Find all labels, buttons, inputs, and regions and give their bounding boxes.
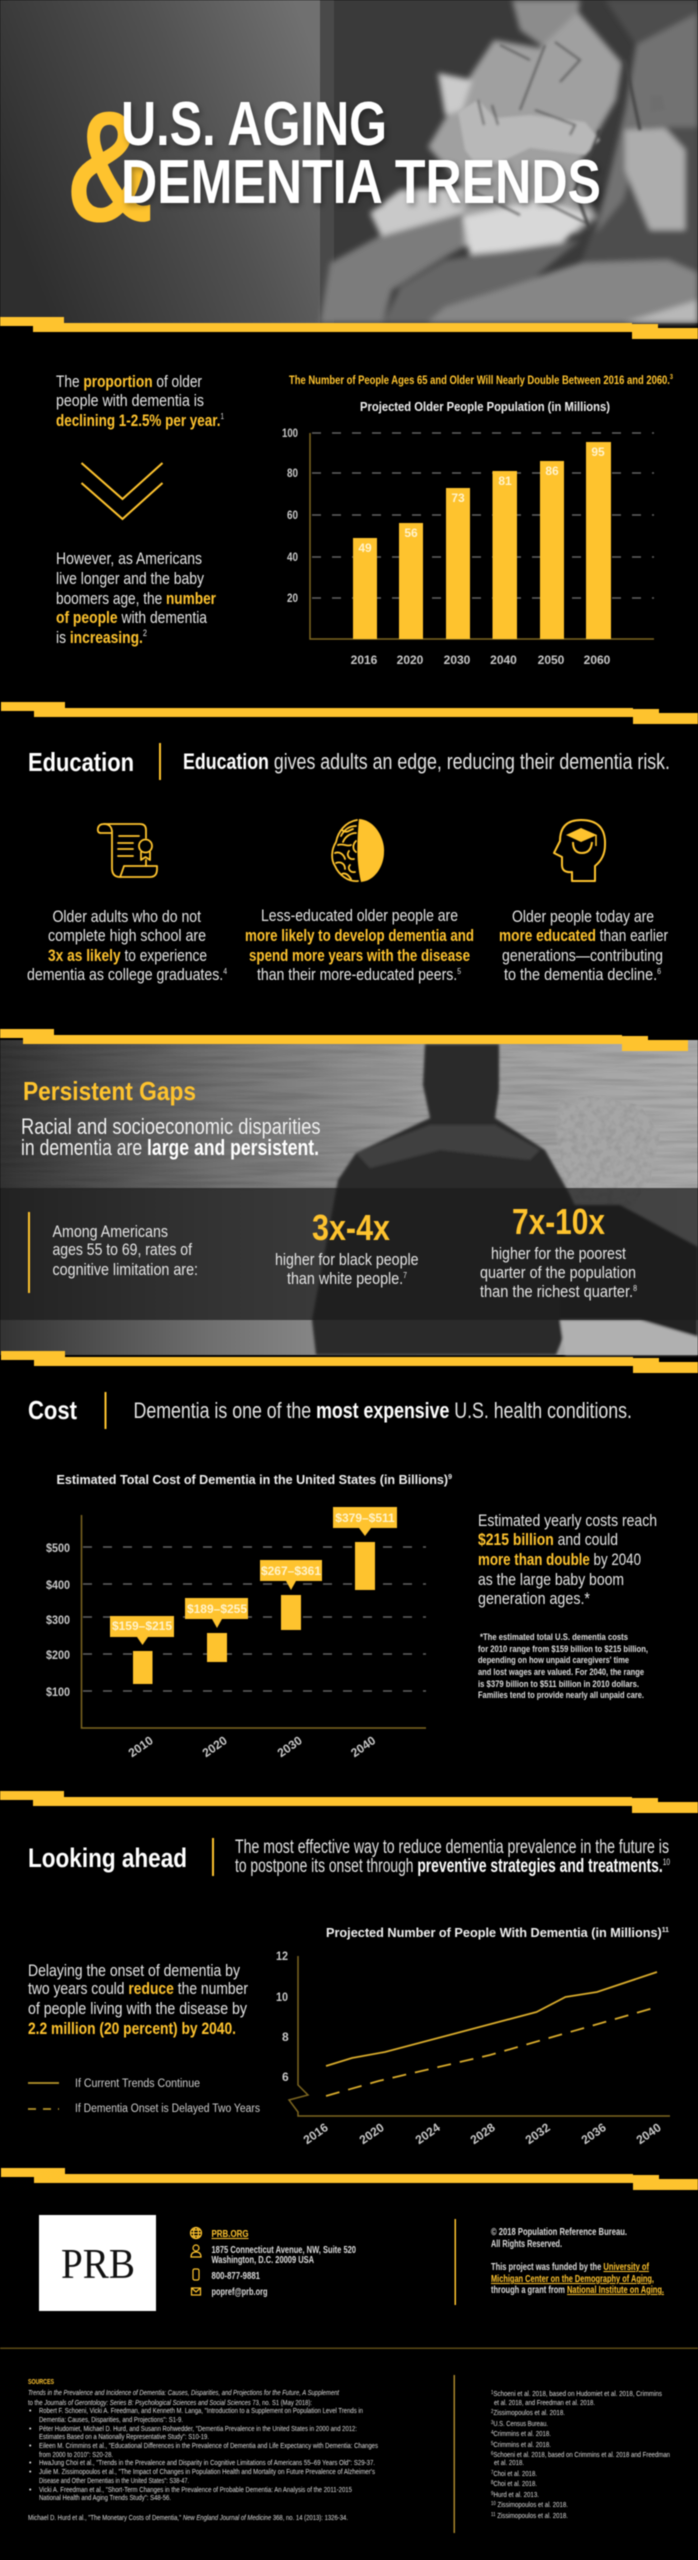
text: among Americans: ages 55 to 69, rates of: [52, 1241, 192, 1259]
text: among Americans: Among Americans: [52, 1223, 168, 1241]
endnotes: 2: [491, 2409, 494, 2415]
credits: All Rights Reserved.: [491, 2239, 562, 2250]
gaps summary: in dementia are large and persistent.: [21, 1135, 319, 1160]
bar chart: older population: 86: [545, 464, 559, 478]
bar chart: older population: 80: [287, 466, 298, 480]
range chart: cost of dementia: $189–$255: [187, 1602, 247, 1616]
text: more educated: 6: [657, 967, 661, 976]
endnotes: 8: [491, 2480, 494, 2486]
endnotes: Zissimopoulos et al. 2018.: [496, 2513, 568, 2520]
text: delaying onset: two years could reduce the number: [28, 1979, 248, 1998]
logo: PRB: [39, 2215, 156, 2311]
endnotes: 6: [491, 2451, 494, 2457]
dark overlay band: [0, 1188, 698, 1320]
icon: double down chevron: [82, 463, 162, 519]
gaps summary: [21, 1114, 320, 1160]
heading: persistent gaps: Persistent Gaps: [23, 1076, 196, 1106]
icon: half-filled brain: [332, 819, 384, 882]
endnotes: Crimmins et al. 2018.: [493, 2442, 551, 2449]
text: estimated yearly costs: [478, 1511, 657, 1608]
line chart: projected dementia: 8: [282, 2030, 289, 2044]
endnotes: 10: [491, 2501, 496, 2507]
bar chart: older population: 2050: [538, 653, 565, 667]
source list: •: [29, 2487, 32, 2494]
text: estimated yearly costs: generation ages.*: [478, 1589, 590, 1608]
stat: 7x-10x: than the richest quarter.: [480, 1283, 653, 1301]
text: number of people increasing: boomers age, the number: [56, 589, 216, 608]
bar chart: older population: 40: [287, 550, 298, 564]
title: U.S. AGING: [121, 90, 387, 159]
panel: footer: [39, 2215, 664, 2311]
legend: If Dementia Onset is Delayed Two Years: [75, 2103, 260, 2115]
logo: PRB: PRB: [61, 2242, 135, 2288]
text: estimated yearly costs: Estimated yearly costs reach: [478, 1511, 657, 1530]
contact details: 1875 Connecticut Avenue, NW, Suite 520: [212, 2245, 356, 2256]
looking ahead subtitle: 10: [663, 1857, 670, 1867]
header backdrop gradient: [0, 0, 320, 323]
source list: Eileen M. Crimmins et al., "Educational Differences in the Prevalence of Dementia and Life Expectancy with Dementia: Changes: [39, 2443, 378, 2450]
panel: sources: [28, 2375, 670, 2533]
line chart: projected dementia: 2036: [579, 2120, 609, 2147]
source list: •: [29, 2426, 32, 2433]
header panel: [0, 0, 698, 323]
text: among Americans: [52, 1223, 198, 1279]
text: more educated: to the dementia decline.: [504, 966, 679, 984]
range chart: cost of dementia: $100: [46, 1685, 70, 1699]
credits: © 2018 Population Reference Bureau.: [491, 2227, 627, 2238]
range chart: cost of dementia: 2030: [275, 1733, 305, 1760]
footnote: cost estimate: Families tend to provide nearly all unpaid care.: [478, 1690, 644, 1700]
header ribbon: [0, 317, 698, 339]
bar chart: older population: 2040: [490, 653, 517, 667]
range chart: cost of dementia: 2040: [348, 1733, 378, 1760]
text: proportion declining: 1: [220, 412, 224, 421]
source list: to the Journals of Gerontology: Series B: Psychological Sciences and Social Sciences 73, no. S1 (May 2018):: [28, 2400, 312, 2407]
contact details: Washington, D.C. 20009 USA: [212, 2255, 314, 2266]
text: among Americans: cognitive limitation are:: [52, 1261, 198, 1279]
text: high school: complete high school are: [48, 927, 206, 945]
endnotes: et al. 2018, and Freedman et al. 2018.: [494, 2400, 595, 2407]
source list: Estimates Based on a Nationally Representative Study": S10-19.: [39, 2434, 209, 2441]
source list: Robert F. Schoeni, Vicki A. Freedman, and Kenneth M. Langa, "Introduction to a Supplement on Population Level Trends in: [39, 2408, 363, 2415]
icon: phone: [193, 2269, 199, 2280]
cost subtitle: Dementia is one of the most expensive U.S. health conditions.: [134, 1398, 632, 1423]
footnote: cost estimate: depending on how unpaid caregivers' time: [478, 1655, 629, 1665]
bar chart: older population: 2030: [444, 653, 471, 667]
bar chart: older population: 73: [451, 491, 465, 505]
text: more educated: Older people today are: [512, 908, 654, 926]
line chart: projected dementia: 2024: [413, 2120, 443, 2147]
divider: [212, 1838, 214, 1876]
contact details: PRB.ORG: [212, 2229, 249, 2240]
header photo: man and nurse sitting on a bed: [320, 0, 698, 323]
endnotes: [491, 2390, 670, 2520]
text: delaying onset: Delaying the onset of dementia by: [28, 1961, 240, 1980]
icon: diploma scroll: [98, 824, 157, 877]
endnotes: Hurd et al. 2013.: [493, 2492, 539, 2499]
text: proportion declining: The proportion of older: [56, 372, 202, 391]
bar chart: older population: 20: [287, 591, 298, 605]
divider: [28, 1212, 30, 1293]
ribbon divider: [1, 1351, 698, 1373]
text: number of people increasing: is increasing.: [56, 628, 160, 647]
rule: [0, 2348, 698, 2349]
ribbon divider: [0, 1791, 698, 1813]
line chart: projected dementia: 2028: [468, 2120, 498, 2147]
source list: National Health and Aging Trends Study": S48-56.: [39, 2495, 171, 2502]
panel: looking ahead: [28, 1837, 670, 2147]
source list: Julie M. Zissimopoulos et al., "The Impact of Changes in Population Health and Mortality on Future Prevalence of Alzheimer's: [39, 2469, 375, 2476]
text: more educated: [499, 908, 668, 984]
endnotes: Schoeni et al. 2018, based on Crimmins et al. 2018 and Freedman: [493, 2452, 670, 2459]
endnotes: 5: [491, 2441, 494, 2447]
text: more educated: generations—contributing: [502, 947, 663, 965]
stat: 7x-10x: 8: [633, 1284, 637, 1293]
bar chart: older population: [282, 426, 654, 667]
text: proportion declining: people with dementia is: [56, 391, 204, 410]
range chart: cost of dementia: 2020: [200, 1733, 230, 1760]
text: number of people increasing: live longer and the baby: [56, 569, 204, 588]
text: more educated: more educated than earlier: [499, 927, 668, 945]
source list: Dementia: Causes, Disparities, and Projections": S1-9.: [39, 2417, 183, 2424]
bar chart: older population: 60: [287, 508, 298, 522]
range chart: cost of dementia: $267–$361: [261, 1564, 321, 1578]
source list: [28, 2390, 378, 2522]
text: estimated yearly costs: as the large baby boom: [478, 1570, 624, 1589]
gaps summary: Racial and socioeconomic disparities: [21, 1114, 320, 1139]
source list: Trends in the Prevalence and Incidence of Dementia: Causes, Disparities, and Projections for the Future, A Supplement: [28, 2390, 340, 2397]
text: number of people increasing: However, as Americans: [56, 549, 202, 568]
divider: [454, 2219, 456, 2305]
divider: [104, 1392, 106, 1429]
panel: proportion and number of people: [56, 372, 673, 667]
source list: •: [29, 2408, 32, 2415]
divider: [159, 743, 161, 780]
text: less-educated: [245, 907, 474, 984]
title ampersand: &: [66, 79, 154, 255]
text: high school: Older adults who do not: [52, 908, 201, 926]
source list: Péter Hudomiet, Michael D. Hurd, and Susann Rohwedder, "Dementia Prevalence in the United States in 2000 and 2012:: [39, 2426, 357, 2433]
stat: 3x-4x: higher for black people: [275, 1251, 418, 1269]
text: high school: 3x as likely to experience: [48, 947, 207, 965]
credits: This project was funded by the University of: [491, 2262, 649, 2273]
bar chart: older population: 2020: [397, 653, 424, 667]
icon: head with graduation cap: [554, 820, 605, 881]
range chart: cost of dementia: $500: [46, 1541, 70, 1555]
bar chart: older population: 2016: [351, 653, 378, 667]
chart heading: 11: [662, 1927, 669, 1934]
footnote: cost estimate: is $379 billion to $511 billion in 2010 dollars.: [478, 1679, 639, 1689]
line chart: projected dementia: 2020: [357, 2120, 387, 2147]
bar chart: older population: 95: [591, 445, 605, 459]
legend: [28, 2078, 260, 2115]
endnotes: Schoeni et al. 2018, based on Hudomiet et al. 2018, Crimmins: [493, 2391, 662, 2398]
source list: from 2000 to 2010": S20-28.: [39, 2452, 113, 2459]
text: less-educated: 5: [457, 967, 461, 976]
bar chart: older population: 100: [282, 426, 298, 440]
icon: location person: [191, 2245, 201, 2257]
stat: 7x-10x: 7x-10x: [512, 1201, 605, 1242]
ribbon divider: [1, 702, 698, 724]
legend: If Current Trends Continue: [75, 2078, 200, 2090]
contact details: [212, 2229, 356, 2298]
endnotes: 4: [491, 2430, 494, 2436]
credits: [491, 2227, 664, 2296]
bar chart: older population: 2060: [584, 653, 611, 667]
source list: Vicki A. Freedman et al., "Short-Term Changes in the Prevalence of Probable Dementia: An Analysis of the 2011-2015: [39, 2487, 352, 2494]
title: [121, 90, 601, 217]
chart heading: Projected Number of People With Dementia (in Millions): [326, 1925, 670, 1940]
bar chart: older population: 49: [358, 541, 372, 555]
source list: •: [29, 2443, 32, 2450]
line chart: projected dementia: 6: [282, 2070, 289, 2084]
line chart: projected dementia: 2032: [523, 2120, 553, 2147]
stat: 7x-10x: higher for the poorest: [491, 1245, 626, 1263]
endnotes: 11: [491, 2512, 496, 2518]
stat: 3x-4x: 3x-4x: [312, 1207, 390, 1248]
range chart: cost of dementia: [46, 1507, 426, 1760]
bar chart: older population: 56: [404, 526, 418, 540]
text: estimated yearly costs: $215 billion and could: [478, 1530, 618, 1549]
endnotes: 9: [491, 2491, 494, 2497]
stat: 7x-10x: quarter of the population: [480, 1264, 636, 1282]
bar chart: older population: 81: [498, 474, 512, 488]
text: proportion declining: declining 1-2.5% per year.: [56, 411, 264, 430]
stat: 3x-4x: 7: [403, 1271, 407, 1280]
endnotes: 1: [491, 2390, 494, 2396]
chart subtitle: Projected Older People Population (in Millions): [360, 399, 610, 414]
endnotes: Zissimopoulos et al. 2018.: [493, 2410, 565, 2417]
stat: 7x-10x: [480, 1201, 637, 1301]
text: less-educated: Less-educated older people are: [261, 907, 458, 925]
panel: cost: [28, 1392, 657, 1760]
footnote: cost estimate: for 2010 range from $159 billion to $215 billion,: [478, 1644, 648, 1654]
icon: globe: [190, 2228, 202, 2238]
chart heading: Estimated Total Cost of Dementia in the United States (in Billions): [56, 1473, 447, 1487]
line chart: projected dementia: 12: [276, 1949, 288, 1963]
text: delaying onset: 2.2 million (20 percent) by 2040.: [28, 2019, 236, 2038]
text: number of people increasing: of people with dementia: [56, 608, 207, 627]
icon: mail: [192, 2288, 200, 2295]
education heading: Education: [28, 747, 134, 777]
range chart: cost of dementia: $300: [46, 1613, 70, 1627]
line chart: projected dementia: [276, 1949, 670, 2147]
sources heading: SOURCES: [28, 2379, 54, 2386]
endnotes: Choi et al. 2018.: [493, 2481, 537, 2488]
line chart: projected dementia: 10: [276, 1990, 288, 2004]
text: proportion declining: [56, 372, 224, 430]
source list: Michael D. Hurd et al., "The Monetary Costs of Dementia," New England Journal of Medicine 368, no. 14 (2013): 1326-34.: [28, 2515, 348, 2522]
text: number of people increasing: [56, 549, 216, 647]
text: delaying onset: [28, 1961, 248, 2038]
range chart: cost of dementia: $379–$511: [335, 1511, 395, 1525]
credits: through a grant from National Institute on Aging.: [491, 2285, 664, 2296]
range chart: cost of dementia: $159–$215: [112, 1619, 172, 1633]
text: high school: [27, 908, 227, 984]
chart heading: 3: [670, 374, 673, 381]
endnotes: 7: [491, 2470, 494, 2476]
range chart: cost of dementia: $200: [46, 1648, 70, 1662]
text: delaying onset: of people living with the disease by: [28, 1999, 247, 2018]
endnotes: 3: [491, 2420, 493, 2426]
looking ahead subtitle: [235, 1837, 670, 1877]
range chart: cost of dementia: 2010: [126, 1733, 156, 1760]
text: less-educated: more likely to develop dementia and: [245, 927, 474, 945]
text: high school: 4: [223, 967, 227, 976]
footnote: cost estimate: [478, 1632, 648, 1700]
panel: education: [27, 743, 670, 984]
panel: persistent gaps: [0, 1040, 698, 1355]
title: DEMENTIA TRENDS: [121, 148, 601, 217]
source list: Disease and Other Dementias in the United States": S38-47.: [39, 2478, 189, 2485]
text: less-educated: than their more-educated peers.: [257, 966, 492, 984]
endnotes: Zissimopoulos et al. 2018.: [496, 2502, 568, 2509]
source list: •: [29, 2460, 32, 2467]
footnote: cost estimate: *The estimated total U.S. dementia costs: [480, 1632, 628, 1642]
cost heading: Cost: [28, 1395, 77, 1425]
endnotes: et al. 2018.: [494, 2460, 524, 2467]
range chart: cost of dementia: $400: [46, 1578, 70, 1592]
contact details: popref@prb.org: [212, 2287, 268, 2298]
endnotes: U.S. Census Bureau.: [493, 2421, 548, 2428]
source list: •: [29, 2469, 32, 2476]
contact details: 800-877-9881: [212, 2271, 260, 2282]
source list: HwaJung Choi et al., "Trends in the Prevalence and Disparity in Cognitive Limitations of Americans 55–69 Years Old": S29-37.: [39, 2460, 375, 2467]
ribbon divider: [0, 1029, 688, 1051]
stat: 3x-4x: [275, 1207, 418, 1288]
text: less-educated: spend more years with the disease: [249, 947, 470, 965]
chart heading: 9: [448, 1474, 452, 1481]
looking ahead heading: Looking ahead: [28, 1843, 187, 1873]
text: number of people increasing: 2: [143, 628, 147, 638]
photo: two people facing the sea: [0, 1040, 698, 1355]
line chart: projected dementia: 2040: [634, 2120, 664, 2147]
footnote: cost estimate: and lost wages are valued. For 2040, the range: [478, 1667, 644, 1677]
text: high school: dementia as college graduates.: [27, 966, 256, 984]
stat: 3x-4x: than white people.: [287, 1270, 421, 1288]
divider: [454, 2375, 455, 2533]
endnotes: Crimmins et al. 2018.: [493, 2431, 551, 2438]
endnotes: Choi et al. 2018.: [493, 2471, 537, 2478]
text: estimated yearly costs: more than double by 2040: [478, 1550, 641, 1569]
ribbon divider: [1, 2168, 698, 2190]
line chart: projected dementia: 2016: [301, 2120, 331, 2147]
